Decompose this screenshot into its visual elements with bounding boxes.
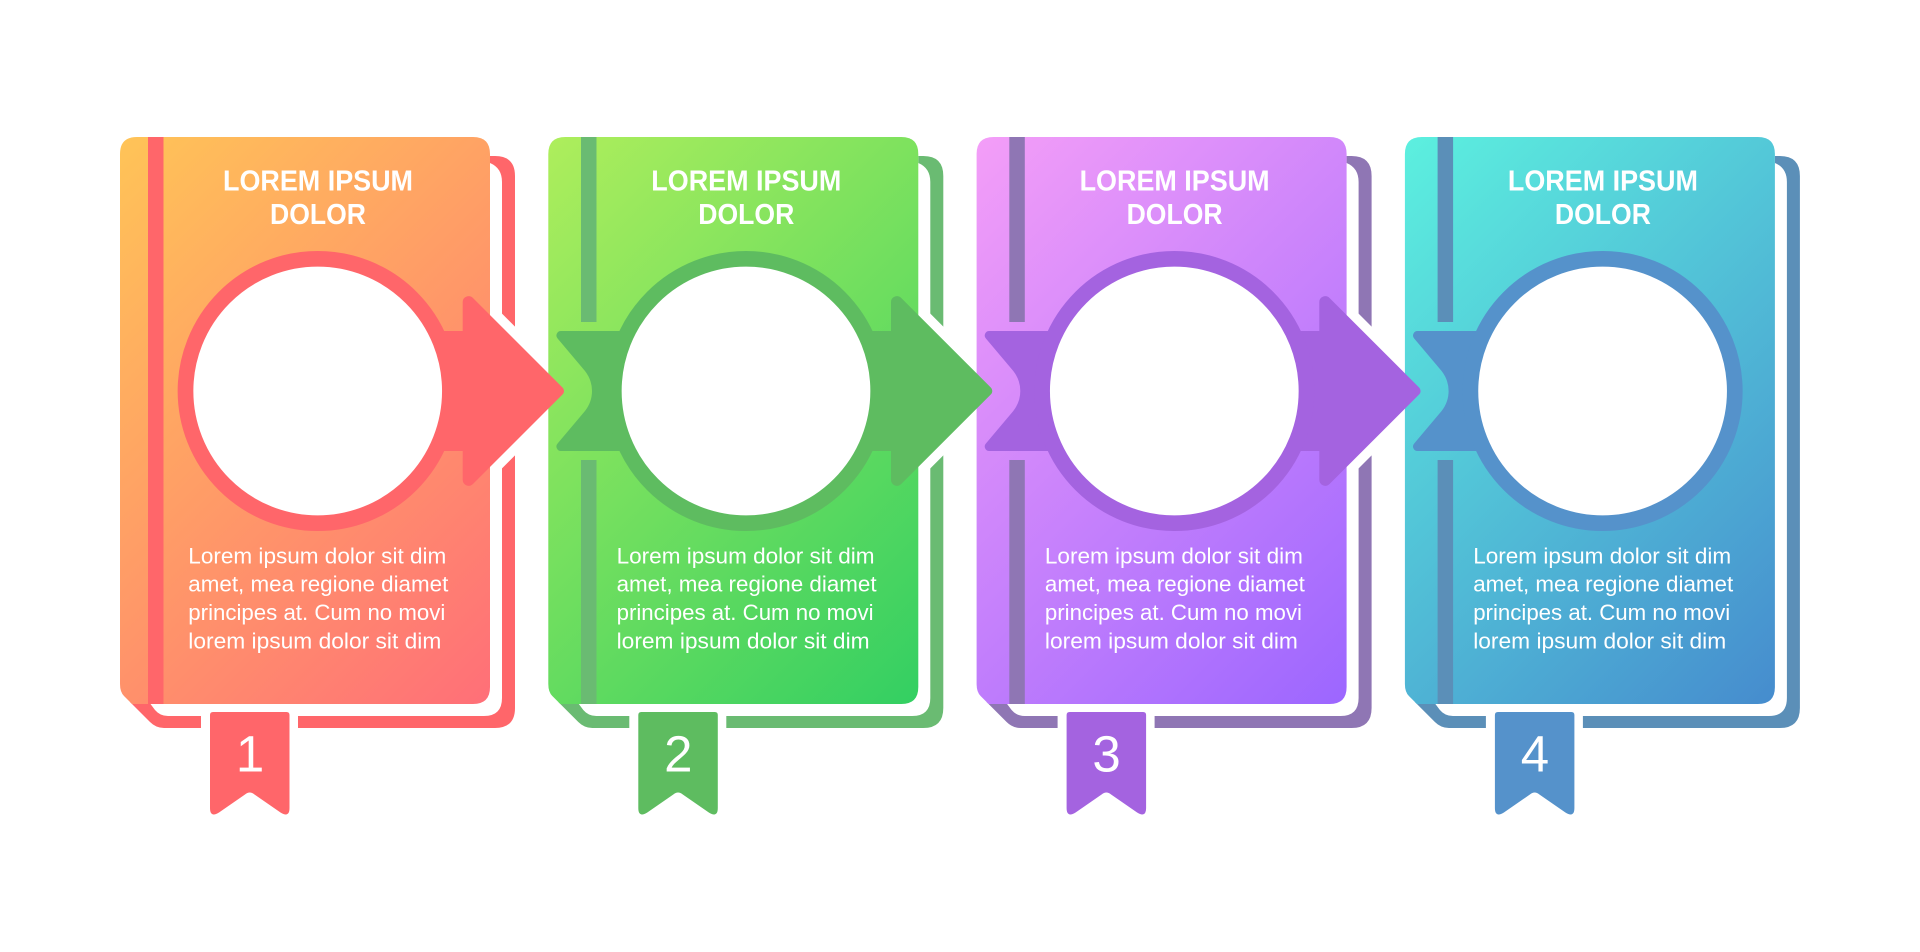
heading 1: LOREM IPSUM — [223, 166, 413, 198]
ring 1 — [186, 259, 450, 523]
body text 2: lorem ipsum dolor sit dim — [617, 629, 870, 654]
body text 3: lorem ipsum dolor sit dim — [1045, 629, 1298, 654]
spine strip 1 — [148, 137, 164, 704]
number 4: 4 — [1521, 726, 1549, 783]
ring 3 — [1042, 259, 1306, 523]
body text 1: lorem ipsum dolor sit dim — [188, 629, 441, 654]
back cover 1 — [130, 156, 515, 728]
arrow 2 — [846, 296, 992, 486]
heading 1: DOLOR — [270, 199, 366, 231]
body text 3: principes at. Cum no movi — [1045, 600, 1302, 625]
bookmark gap 2 — [629, 712, 726, 732]
bookmark gap 1 — [201, 712, 298, 732]
front cover 3 — [977, 137, 1347, 704]
number 1: 1 — [236, 726, 264, 783]
arrow tail 3 — [985, 331, 1074, 451]
body text 2: principes at. Cum no movi — [617, 600, 874, 625]
arrow tail 2 — [556, 331, 646, 451]
arrow halo 2 — [846, 296, 992, 486]
arrow halo 3 — [1274, 296, 1421, 486]
bookmark 1 — [210, 712, 290, 814]
arrow 1 — [418, 296, 564, 486]
heading 4: DOLOR — [1555, 199, 1651, 231]
icon: ring and arrow 3 — [985, 259, 1421, 523]
icon: ring and arrow 1 — [186, 259, 564, 523]
number 2: 2 — [664, 726, 692, 783]
bookmark 3 — [1067, 712, 1146, 814]
heading 4: LOREM IPSUM — [1508, 166, 1698, 198]
arrow halo 1 — [418, 296, 564, 486]
heading 2: DOLOR — [698, 199, 794, 231]
front cover 2 — [548, 137, 918, 704]
panel: book 2 — [548, 137, 992, 814]
body text 3: amet, mea regione diamet — [1045, 572, 1305, 597]
body text 4: amet, mea regione diamet — [1473, 572, 1733, 597]
body text 1: amet, mea regione diamet — [188, 572, 448, 597]
back cover 3 — [987, 156, 1372, 728]
bookmark gap 4 — [1486, 712, 1583, 732]
heading 2: LOREM IPSUM — [651, 166, 841, 198]
spine strip 3 — [1009, 137, 1025, 704]
back cover 2 — [558, 156, 943, 728]
heading 3: DOLOR — [1127, 199, 1223, 231]
bookmark 2 — [638, 712, 718, 814]
ring 2 — [614, 259, 878, 523]
body text 1: principes at. Cum no movi — [188, 600, 445, 625]
body text 2: Lorem ipsum dolor sit dim — [617, 543, 875, 568]
number 3: 3 — [1092, 726, 1121, 783]
icon: ring and arrow 2 — [556, 259, 992, 523]
panel: book 4 — [1405, 137, 1800, 814]
body text 3: Lorem ipsum dolor sit dim — [1045, 543, 1303, 568]
body text 1: Lorem ipsum dolor sit dim — [188, 543, 446, 568]
body text 4: principes at. Cum no movi — [1473, 600, 1730, 625]
ring 4 — [1470, 259, 1735, 523]
body text 4: lorem ipsum dolor sit dim — [1473, 629, 1726, 654]
bookmark 4 — [1495, 712, 1574, 814]
bookmark gap 3 — [1058, 712, 1155, 732]
body text 4: Lorem ipsum dolor sit dim — [1473, 543, 1731, 568]
body text 2: amet, mea regione diamet — [617, 572, 877, 597]
front cover 4 — [1405, 137, 1775, 704]
panel: book 3 — [977, 137, 1421, 814]
arrow 3 — [1274, 296, 1421, 486]
arrow tail 4 — [1413, 331, 1503, 451]
panel: book 1 — [120, 137, 564, 814]
icon: ring 4 with tail — [1413, 259, 1735, 523]
back cover 4 — [1415, 156, 1800, 728]
spine strip 2 — [581, 137, 596, 704]
spine strip 4 — [1438, 137, 1453, 704]
front cover 1 — [120, 137, 490, 704]
heading 3: LOREM IPSUM — [1080, 166, 1270, 198]
